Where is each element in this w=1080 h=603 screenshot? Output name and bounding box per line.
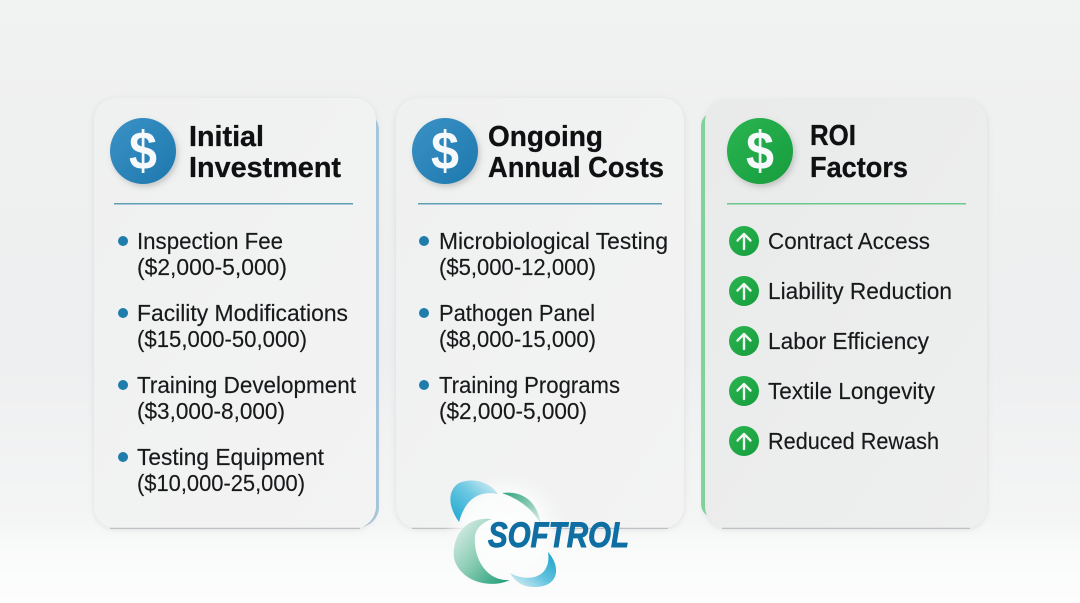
heading: roi factors: ROI: [810, 120, 856, 152]
heading: initial investment: Initial: [189, 121, 264, 153]
logo: softrol: [443, 471, 629, 595]
heading: ongoing annual costs: Annual Costs: [488, 152, 664, 184]
panel: initial investment: [94, 98, 379, 529]
list: initial investment items: ($10,000-25,000): [137, 470, 305, 496]
icon: blue dollar coin: $: [431, 121, 459, 181]
list: ongoing annual cost items: Training Programs: [439, 372, 620, 398]
icon: blue dollar coin: $: [129, 121, 157, 181]
list: ongoing annual cost items: Pathogen Panel: [439, 300, 595, 326]
icon: blue dollar coin: [110, 118, 176, 184]
list: initial investment items: Inspection Fee: [137, 228, 283, 254]
icon: green dollar coin: [727, 118, 793, 184]
list: initial investment items: ($3,000-8,000): [137, 398, 285, 424]
list: roi factor items: Labor Efficiency: [768, 328, 929, 354]
icon: green dollar coin: $: [746, 121, 774, 181]
list: roi factor items: Textile Longevity: [768, 378, 935, 404]
heading: roi factors: Factors: [810, 152, 908, 184]
list: ongoing annual cost items: ($2,000-5,000): [439, 398, 587, 424]
list: ongoing annual cost items: ($5,000-12,000): [439, 254, 596, 280]
heading: ongoing annual costs: Ongoing: [488, 121, 603, 153]
list: initial investment items: Training Development: [137, 372, 357, 398]
list: ongoing annual cost items: ($8,000-15,000): [439, 326, 596, 352]
icon: blue dollar coin: [412, 118, 478, 184]
list: initial investment items: ($15,000-50,000): [137, 326, 307, 352]
list: initial investment items: Testing Equipment: [137, 444, 325, 470]
list: initial investment items: ($2,000-5,000): [137, 254, 287, 280]
panel: ongoing annual costs: [396, 98, 684, 529]
list: roi factor items: Contract Access: [768, 228, 930, 254]
heading: initial investment: Investment: [189, 152, 341, 184]
logo wordmark: SOFTROL: [488, 516, 629, 555]
list: roi factor items: [729, 226, 952, 456]
list: roi factor items: Reduced Rewash: [768, 428, 939, 454]
panel: roi factors: [701, 100, 987, 529]
list: initial investment items: Facility Modifications: [137, 300, 348, 326]
list: roi factor items: Liability Reduction: [768, 278, 952, 304]
list: initial investment items: [118, 228, 357, 496]
list: ongoing annual cost items: [419, 228, 668, 424]
list: ongoing annual cost items: Microbiological Testing: [439, 228, 668, 254]
